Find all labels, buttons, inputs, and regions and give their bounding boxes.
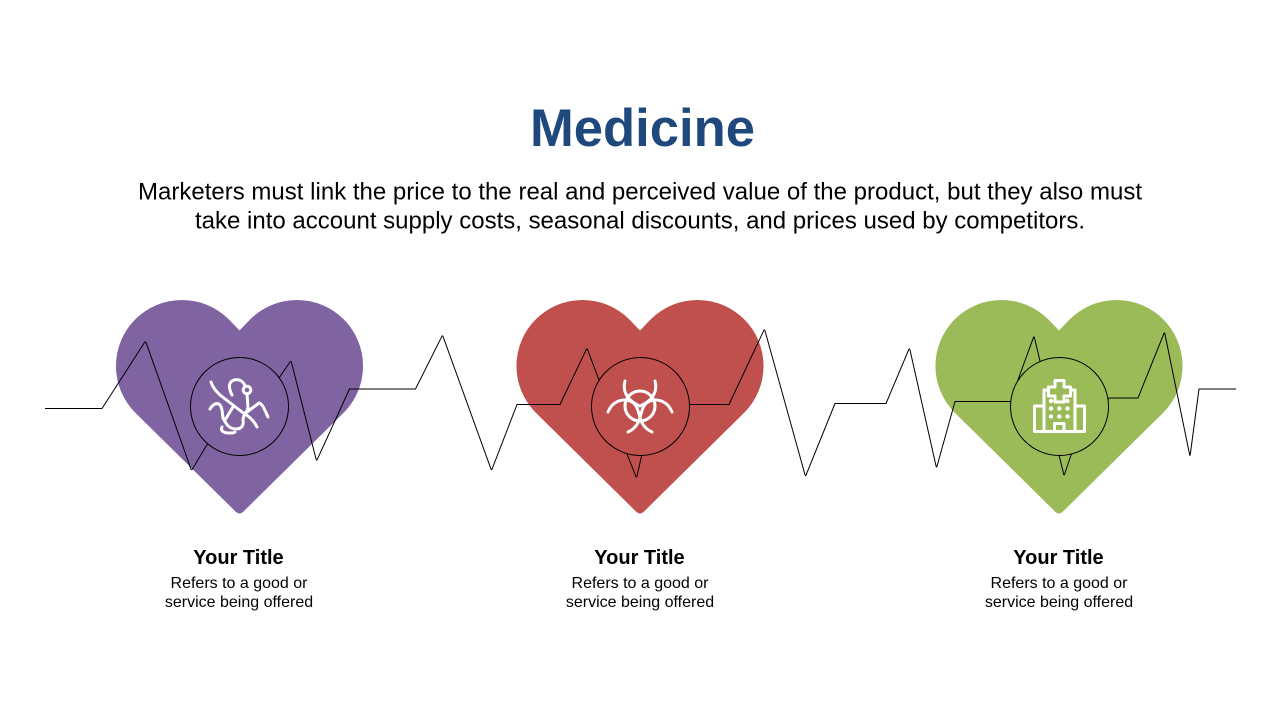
icon: biohazard xyxy=(608,381,672,432)
description text xyxy=(138,178,1142,234)
heartbeat line xyxy=(45,330,1236,477)
icon circle: red xyxy=(592,358,690,456)
description text: Marketers must link the price to the real and perceived value of the product, but they also must xyxy=(138,178,1142,206)
icon circle: green xyxy=(1010,358,1108,456)
icon: hospital xyxy=(1034,380,1084,432)
icon: crossed-out figure xyxy=(210,380,268,433)
caption: purple heart: Refers to a good or xyxy=(171,575,308,592)
caption: purple heart xyxy=(165,547,313,611)
caption: green heart: Refers to a good or xyxy=(991,575,1128,592)
heart: red xyxy=(516,300,764,514)
icon circle: purple xyxy=(190,358,288,456)
caption: red heart xyxy=(566,547,714,611)
caption: purple heart: service being offered xyxy=(165,594,313,611)
heart: green xyxy=(935,300,1183,514)
caption: red heart: Your Title xyxy=(594,547,685,569)
caption: purple heart: Your Title xyxy=(193,547,284,569)
caption: green heart: service being offered xyxy=(985,594,1133,611)
heart: purple xyxy=(116,300,363,514)
caption: red heart: service being offered xyxy=(566,594,714,611)
title: Medicine xyxy=(530,99,755,158)
caption: red heart: Refers to a good or xyxy=(572,575,709,592)
caption: green heart: Your Title xyxy=(1013,547,1104,569)
description text: take into account supply costs, seasonal discounts, and prices used by competitors. xyxy=(195,208,1085,234)
caption: green heart xyxy=(985,547,1133,611)
